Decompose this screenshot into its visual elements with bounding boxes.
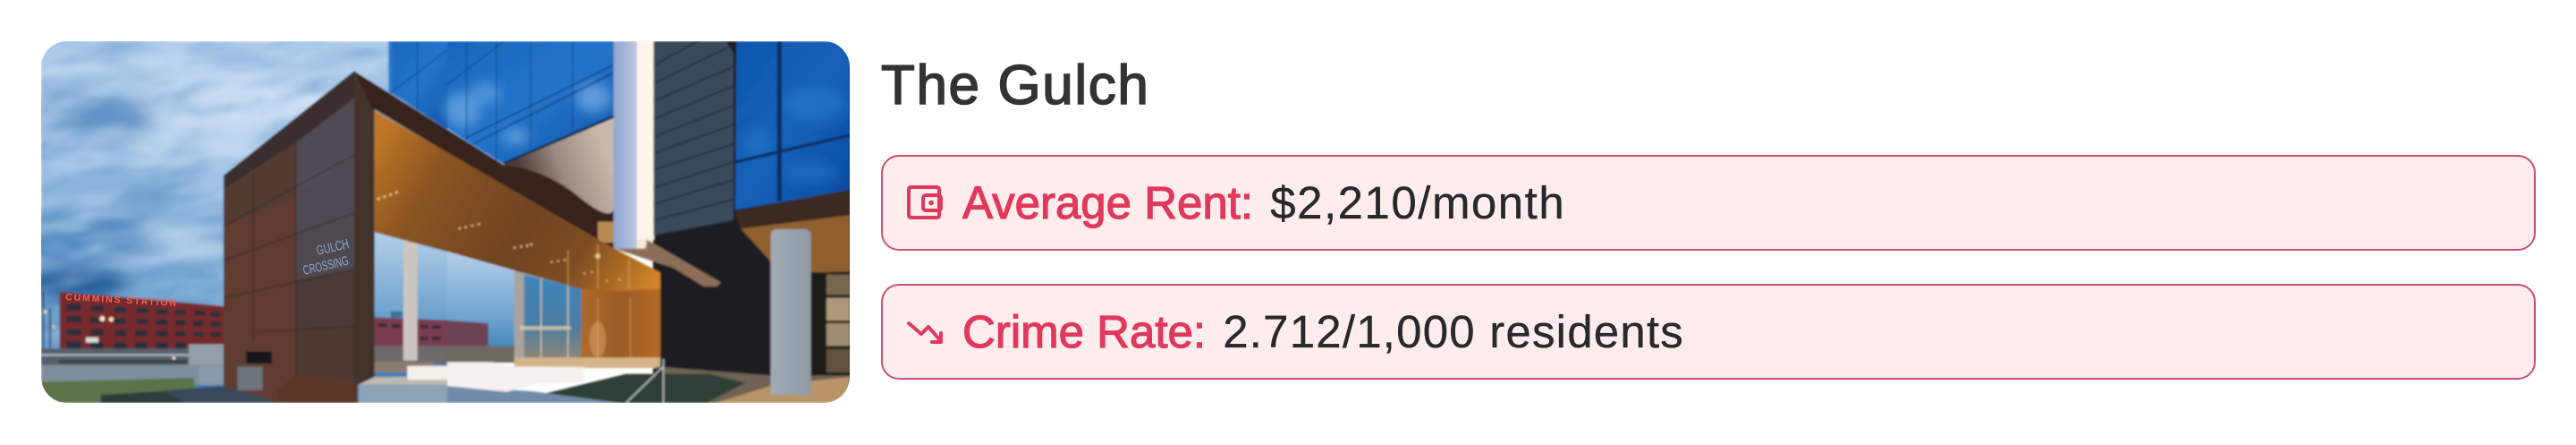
sign: Cummins Station: CUMMINS STATION	[65, 292, 176, 309]
icon: trending down arrow	[907, 321, 943, 344]
icon: wallet	[907, 185, 943, 219]
white column and light strip	[614, 41, 637, 249]
panel: average rent	[881, 155, 2536, 251]
wooden soffit main	[375, 110, 660, 291]
sign: Gulch Crossing: CROSSING	[301, 253, 350, 278]
black wall	[655, 220, 771, 377]
recessed ceiling	[504, 118, 614, 220]
photo: Gulch Crossing building at dusk	[41, 41, 850, 403]
portal right strip	[354, 71, 375, 384]
background sky through portal	[375, 232, 447, 365]
sign: Gulch Crossing	[303, 239, 349, 274]
panel: crime rate	[881, 284, 2536, 380]
canopy fascia	[614, 240, 721, 287]
Cummins Station brick building (left background)	[60, 292, 224, 350]
sky through lobby	[447, 252, 514, 362]
lobby glass	[524, 274, 581, 358]
pillar	[771, 229, 811, 395]
blue glass tower	[447, 41, 614, 164]
lobby warm wall	[580, 287, 660, 358]
plaza	[359, 377, 447, 388]
right glass	[726, 41, 749, 52]
sign: Gulch Crossing: GULCH	[315, 235, 351, 258]
ground	[656, 366, 850, 403]
dark backing behind right half	[653, 41, 852, 403]
portal left face	[222, 143, 359, 403]
beam under right glass	[735, 190, 850, 228]
dark siding	[654, 41, 733, 235]
text: average rent: Average Rent: $2,210/month	[962, 177, 1565, 228]
text: crime rate: Crime Rate: 2.712/1,000 residents	[962, 306, 1684, 357]
heading: The Gulch	[881, 55, 1149, 116]
white bench and base	[447, 384, 620, 403]
dark beam	[354, 71, 614, 252]
door	[811, 272, 850, 375]
